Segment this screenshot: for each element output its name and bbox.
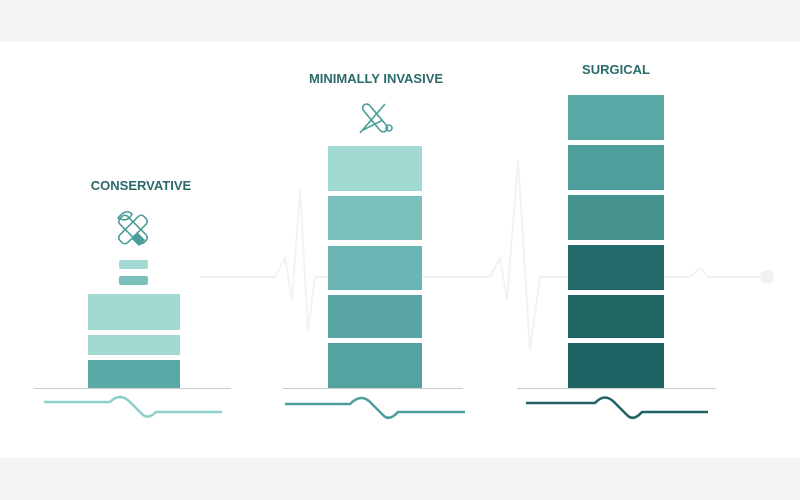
column: conservative	[34, 178, 231, 417]
heading: minimally invasive: MINIMALLY INVASIVE	[309, 71, 443, 86]
icon: bandage and leaf	[117, 212, 149, 245]
column: surgical	[517, 62, 716, 418]
wave: conservative	[44, 397, 222, 417]
bar stack: minimally invasive	[328, 146, 422, 388]
column: minimally invasive	[283, 71, 465, 418]
icon: crossed instruments	[360, 102, 392, 134]
wave: surgical	[526, 398, 708, 418]
bar stack: surgical	[568, 95, 664, 388]
bar stack: conservative	[88, 294, 180, 388]
heading: surgical: SURGICAL	[582, 62, 650, 77]
wave: minimally invasive	[285, 398, 465, 418]
heading: conservative: CONSERVATIVE	[91, 178, 192, 193]
background ecg line	[200, 160, 773, 350]
small pills	[119, 260, 148, 285]
